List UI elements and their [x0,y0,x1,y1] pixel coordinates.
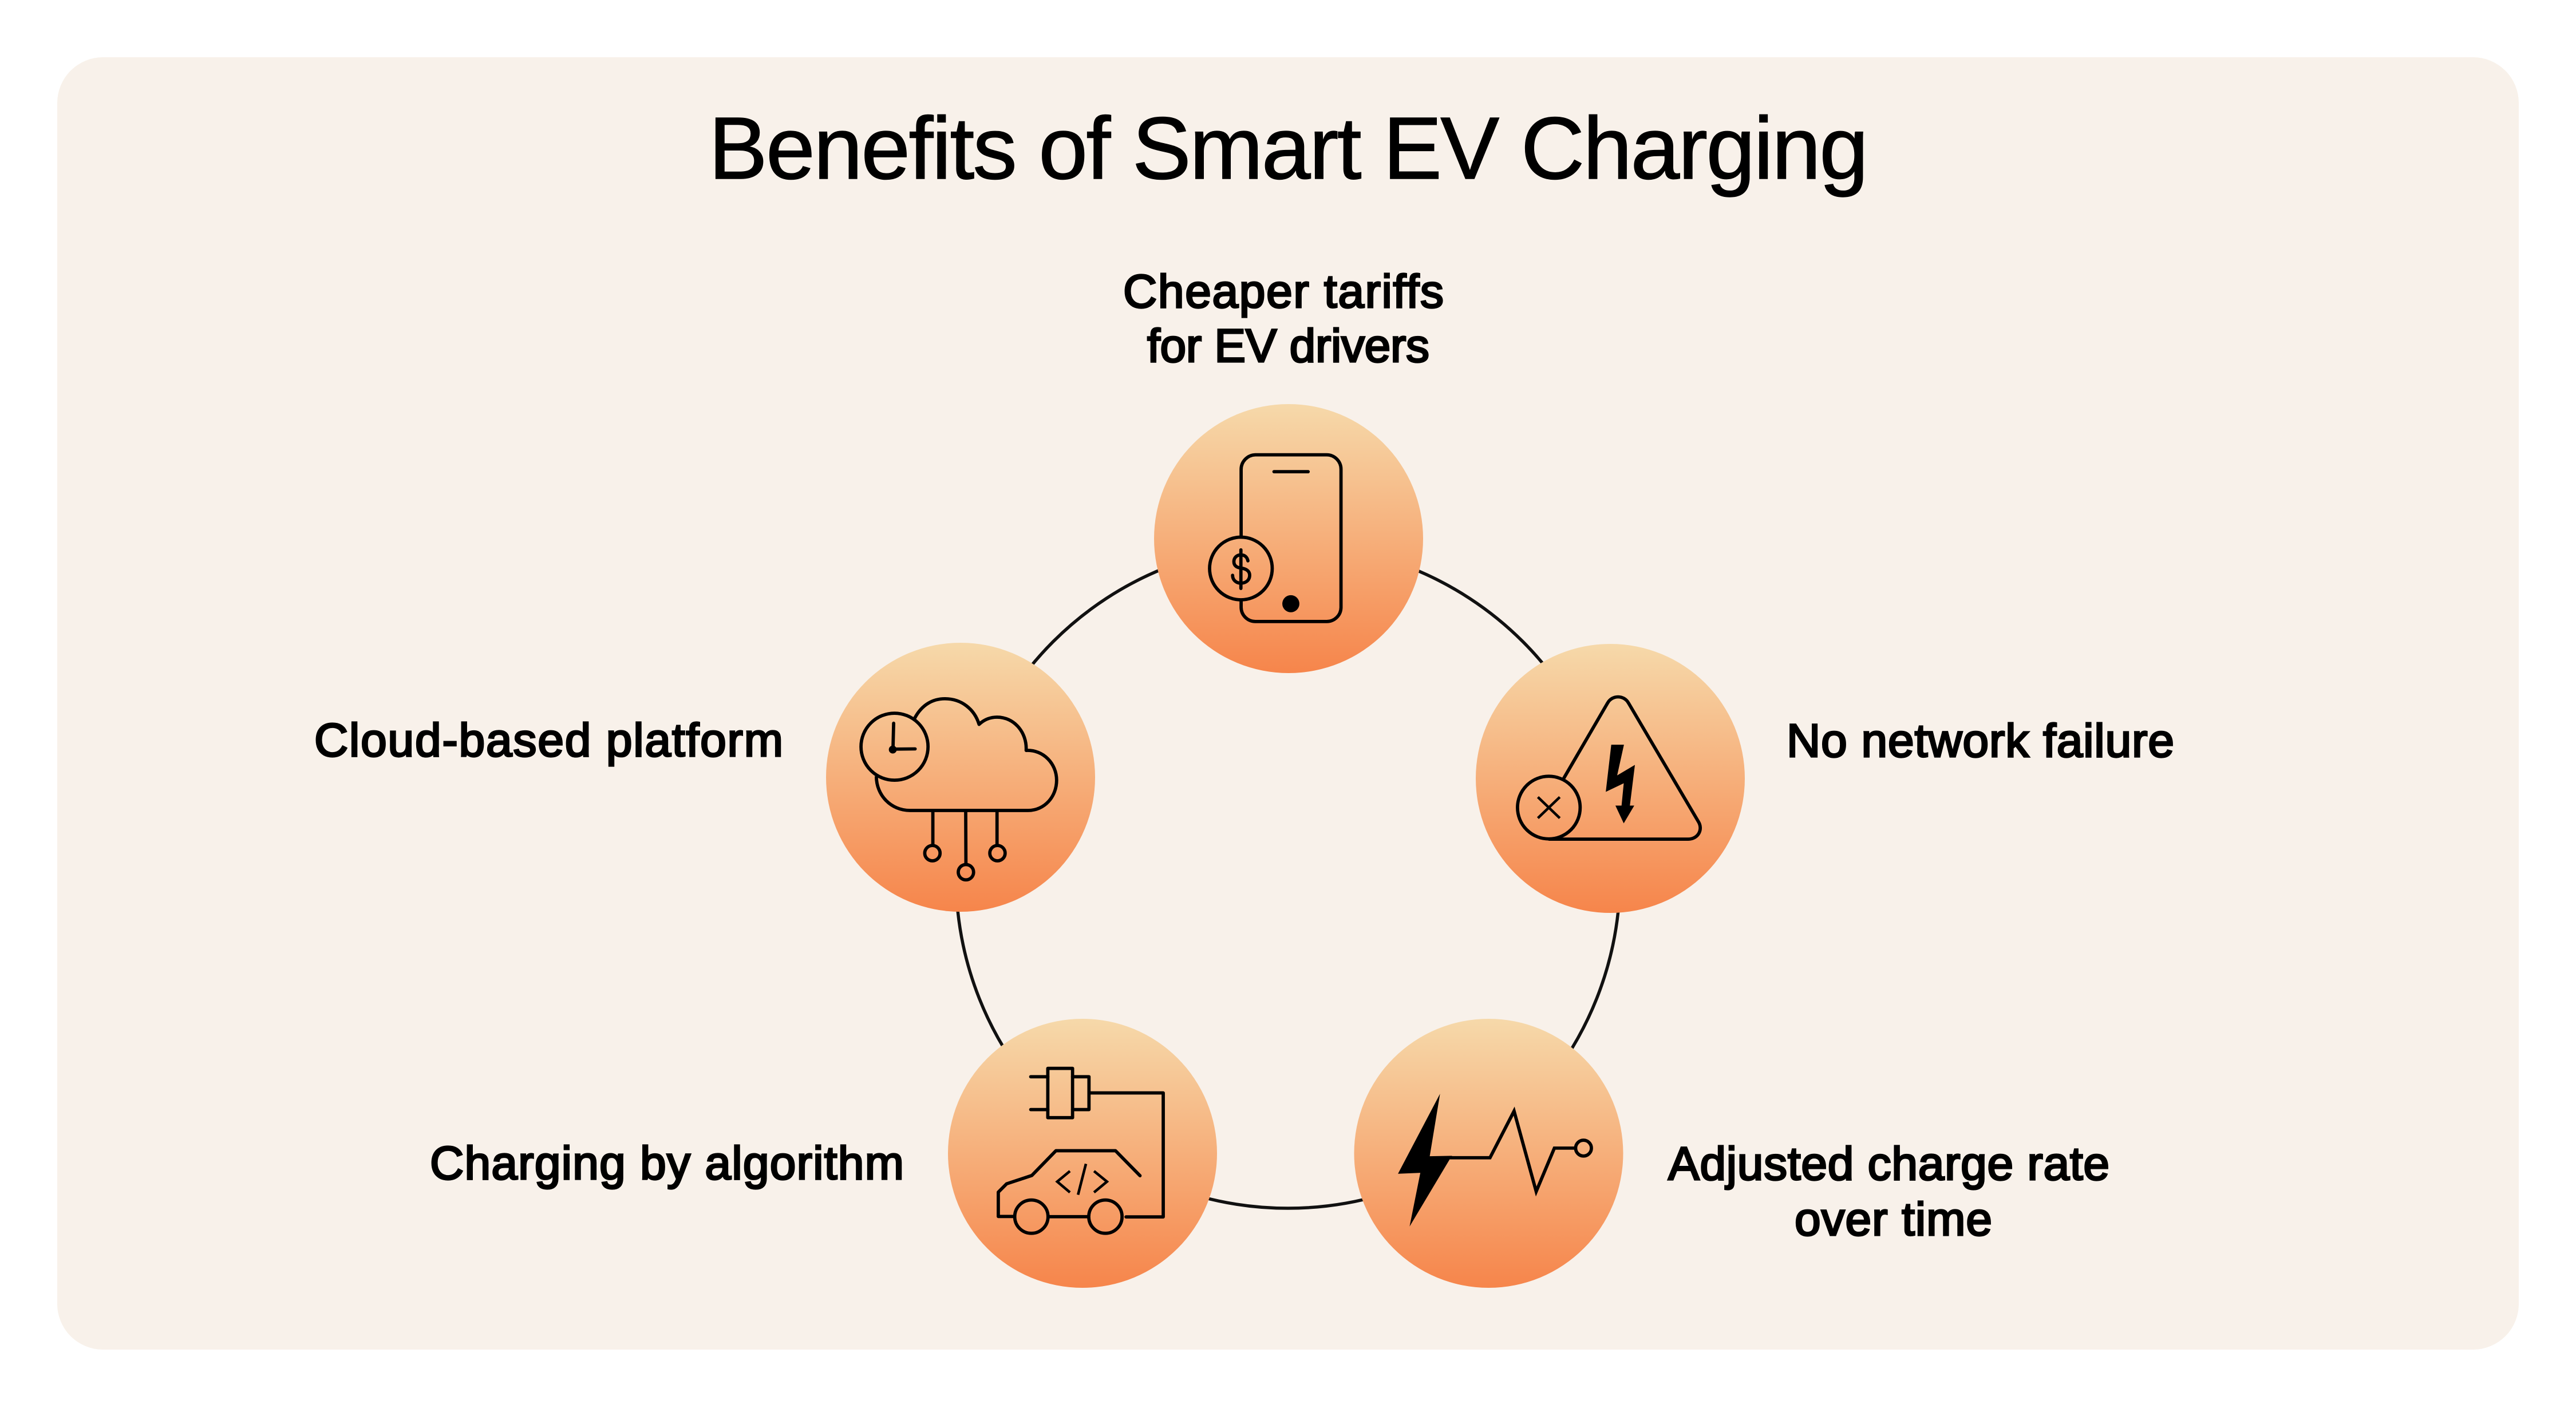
label: cheaper tariffs for EV drivers: for EV drivers [1147,320,1429,372]
label: adjusted charge rate over time: Adjusted charge rate [1668,1138,2109,1190]
circle: adjusted charge rate [1354,1019,1623,1288]
icon: bolt with fluctuating line [1398,1094,1591,1227]
benefit: charging by algorithm [430,1019,1217,1288]
connecting ring [956,544,1620,1208]
label: cheaper tariffs for EV drivers: Cheaper tariffs [1123,266,1444,318]
label: no network failure: No network failure [1787,715,2174,767]
benefit: adjusted charge rate [1354,1019,2109,1288]
icon: warning triangle with bolt and cross [1518,697,1700,839]
benefit: no network failure [1476,644,2174,913]
title: Benefits of Smart EV Charging [709,99,1868,197]
label: adjusted charge rate over time [1668,1138,2109,1245]
label: cheaper tariffs for EV drivers [1123,266,1444,372]
label: adjusted charge rate over time: over time [1795,1193,1992,1245]
circle: cloud-based platform [826,643,1095,912]
benefit: cheaper tariffs [1123,266,1444,673]
circle: no network failure [1476,644,1745,913]
benefit: cloud-based platform [314,643,1095,912]
label: charging by algorithm: Charging by algorithm [430,1137,904,1189]
icon: plug and car with code [998,1069,1163,1233]
circle: charging by algorithm [948,1019,1217,1288]
icon: phone with dollar coin [1210,455,1341,622]
circle: cheaper tariffs [1154,404,1423,673]
icon: cloud with clock and nodes [861,699,1057,880]
label: cloud-based platform: Cloud-based platform [314,714,783,766]
